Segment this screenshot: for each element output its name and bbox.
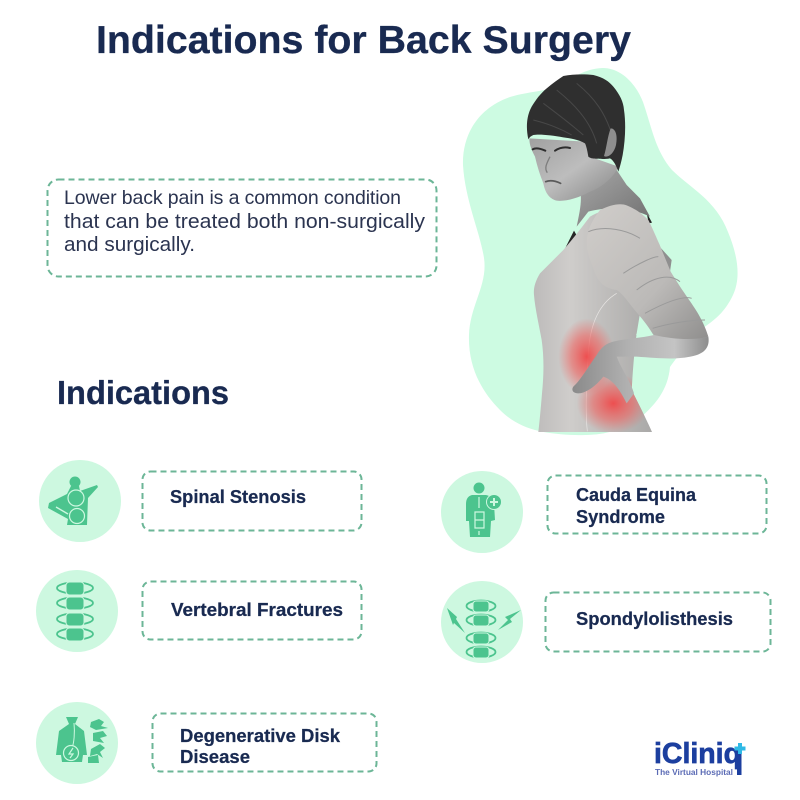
intro text box: and surgically. (64, 233, 195, 256)
dark top under the neckline (564, 213, 652, 251)
item: Vertebral Fractures (36, 570, 362, 652)
facial features (533, 147, 570, 151)
label box (152, 714, 376, 772)
item: Cauda Equina Syndrome (441, 471, 766, 553)
upper back behind arm (647, 220, 672, 273)
icon: vertebrae (36, 570, 118, 652)
intro text box (48, 180, 436, 276)
label box: Spinal Stenosis (170, 487, 306, 507)
hair (527, 74, 625, 172)
gap between arm and body (636, 323, 654, 335)
label box: Cauda Equina (576, 485, 697, 505)
heading: Indications: Indications (57, 374, 229, 411)
item: Spinal Stenosis (39, 460, 362, 542)
photo: woman holding her lower back (527, 74, 709, 433)
face (529, 138, 618, 201)
label box (546, 592, 770, 652)
label box: Disease (180, 747, 250, 767)
waist seam (586, 293, 617, 431)
icon: figure with plus (441, 471, 523, 553)
label box: Vertebral Fractures (171, 600, 343, 620)
forearm and hand (572, 335, 709, 403)
label box (548, 476, 766, 534)
icon: back pain figure (39, 460, 121, 542)
label box: Syndrome (576, 507, 665, 527)
item: Degenerative Disk Disease (36, 702, 376, 784)
icon: back with spine (36, 702, 118, 784)
sleeve creases (588, 229, 705, 328)
title: Indications for Back Surgery (96, 19, 631, 62)
intro text box: Lower back pain is a common condition (64, 187, 401, 209)
red pain area (560, 321, 644, 431)
logo: iCliniq: The Virtual Hospital (655, 767, 733, 777)
label box (142, 472, 362, 530)
icon: vertebrae with lightning (441, 581, 523, 663)
torso (534, 209, 653, 432)
item: Spondylolisthesis (441, 581, 770, 663)
label box: Degenerative Disk (180, 726, 341, 746)
intro text box: that can be treated both non-surgically (64, 210, 426, 233)
arm sleeve (587, 204, 708, 340)
neck (577, 170, 650, 227)
logo: iCliniq: iCliniq (654, 738, 741, 770)
hair highlights (533, 83, 613, 143)
ear (604, 128, 617, 157)
label box: Spondylolisthesis (576, 609, 733, 629)
background blob (463, 68, 738, 435)
label box (142, 582, 362, 640)
